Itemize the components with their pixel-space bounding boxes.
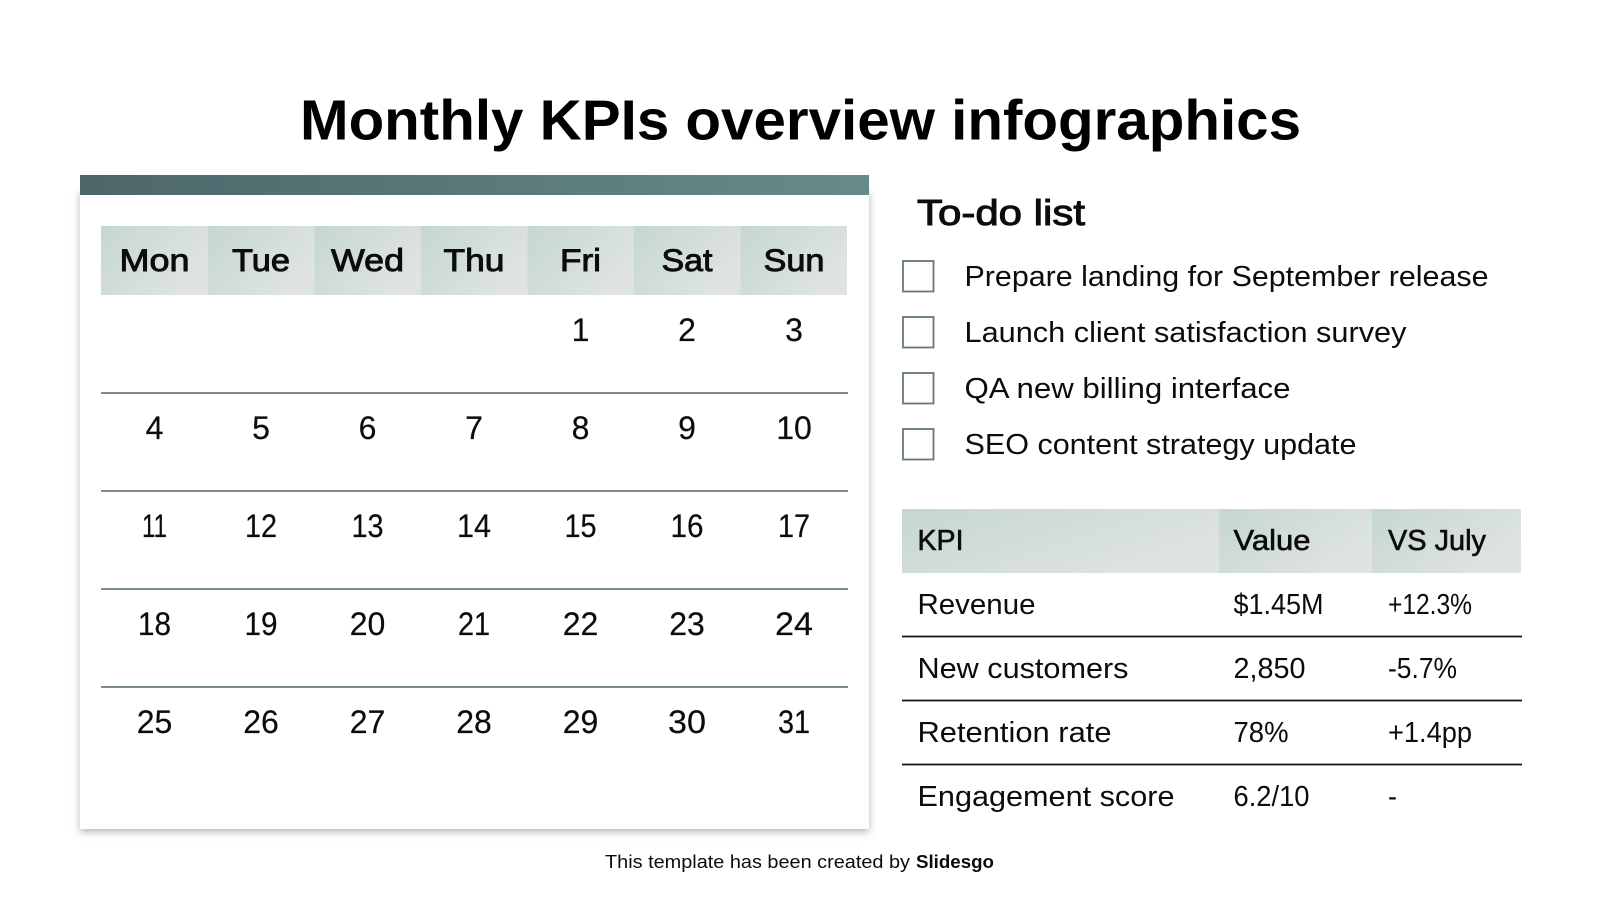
table header: KPI: [918, 525, 964, 557]
calendar dates: 12: [245, 508, 277, 544]
row: new customers: -5.7%: [1388, 653, 1457, 685]
calendar dates: 24: [775, 606, 813, 642]
row: revenue: +12.3%: [1388, 589, 1472, 621]
row: new customers: [918, 653, 1457, 685]
calendar dates: 6: [359, 410, 376, 446]
title: Monthly KPIs overview infographics: [300, 88, 1301, 152]
weekday header row: Sun: [764, 242, 824, 278]
calendar dates: 27: [350, 704, 385, 740]
table header: VS July: [1388, 525, 1487, 557]
calendar dates: 10: [776, 410, 812, 446]
calendar dates: 21: [458, 606, 490, 642]
calendar dates: 2: [678, 312, 696, 348]
to-do item 1: Prepare landing for September release: [964, 261, 1488, 293]
row: engagement score: Engagement score: [918, 781, 1174, 813]
footer credit: Slidesgo: [916, 851, 994, 872]
calendar dates: 25: [137, 704, 172, 740]
weekday header row: Sat: [662, 242, 713, 278]
panel: to-do items: [903, 261, 1488, 461]
calendar dates: 7: [465, 410, 483, 446]
weekday header row: [101, 226, 847, 295]
weekday header row: Thu: [444, 242, 504, 278]
calendar dates: 19: [244, 606, 278, 642]
calendar dates: 3: [785, 312, 803, 348]
panel: calendar: [80, 175, 869, 829]
calendar dates: 29: [563, 704, 598, 740]
footer credit: This template has been created by: [605, 851, 911, 872]
calendar dates: 11: [142, 508, 167, 544]
weekday header row: Fri: [560, 242, 601, 278]
panel: KPI table: [902, 509, 1522, 813]
row: revenue: [918, 589, 1472, 621]
calendar dates: 13: [352, 508, 384, 544]
calendar dates: 30: [668, 704, 706, 740]
heading: to-do list: To-do list: [917, 192, 1085, 233]
row: engagement score: 6.2/10: [1234, 781, 1310, 813]
table header: [902, 509, 1521, 573]
calendar dates: 1: [572, 312, 589, 348]
calendar dates: 16: [670, 508, 704, 544]
calendar dates: 23: [669, 606, 705, 642]
calendar dates: 20: [350, 606, 385, 642]
row: new customers: 2,850: [1234, 653, 1306, 685]
calendar card: [80, 190, 869, 829]
calendar dates: 17: [778, 508, 810, 544]
row: engagement score: -: [1388, 781, 1397, 813]
row: new customers: New customers: [918, 653, 1128, 685]
to-do item 3: QA new billing interface: [964, 373, 1290, 405]
calendar dates: 8: [572, 410, 589, 446]
row: retention rate: 78%: [1234, 717, 1288, 749]
calendar dates: 15: [564, 508, 596, 544]
calendar dates: 31: [778, 704, 810, 740]
calendar top bar: [80, 175, 869, 195]
row: revenue: Revenue: [918, 589, 1036, 621]
weekday header row: Mon: [120, 242, 190, 278]
row: retention rate: Retention rate: [918, 717, 1112, 749]
weekday header row: Wed: [331, 242, 404, 278]
calendar dates: 14: [457, 508, 491, 544]
calendar dates: 9: [678, 410, 696, 446]
calendar dates: [137, 312, 813, 740]
row: revenue: $1.45M: [1234, 589, 1324, 621]
table header: Value: [1234, 525, 1310, 557]
calendar dates: 18: [138, 606, 171, 642]
to-do item 4: SEO content strategy update: [964, 429, 1356, 461]
weekday header row: Tue: [232, 242, 290, 278]
calendar dates: 4: [146, 410, 163, 446]
calendar dates: 22: [563, 606, 598, 642]
row: retention rate: +1.4pp: [1388, 717, 1472, 749]
row: retention rate: [918, 717, 1472, 749]
calendar dates: 26: [243, 704, 279, 740]
to-do item 2: Launch client satisfaction survey: [964, 317, 1407, 349]
row: engagement score: [918, 781, 1397, 813]
calendar dates: 28: [456, 704, 492, 740]
calendar dates: 5: [252, 410, 270, 446]
